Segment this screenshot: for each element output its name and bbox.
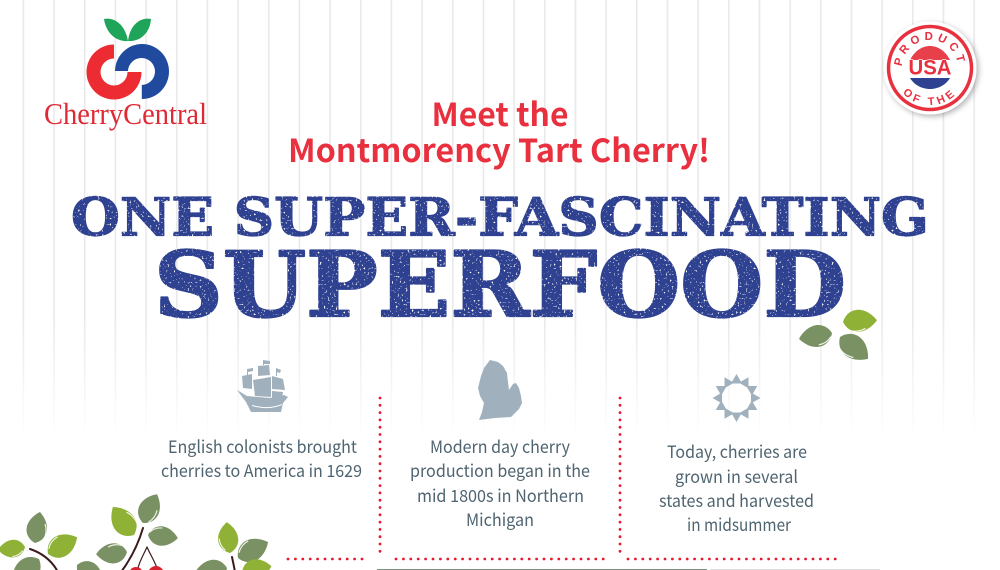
text: states and harvested bbox=[659, 487, 814, 512]
branches bbox=[30, 528, 235, 570]
text bbox=[659, 438, 814, 536]
next section image edge bbox=[377, 569, 880, 570]
title: SUPERFOOD bbox=[154, 232, 846, 338]
heading: Meet the bbox=[432, 90, 568, 136]
fact 1: colonists bbox=[161, 360, 362, 482]
badge arc text: OF THE bbox=[904, 89, 954, 105]
fact 2: Michigan bbox=[410, 360, 590, 531]
icon: sun bbox=[712, 374, 760, 422]
text: mid 1800s in Northern bbox=[417, 482, 584, 507]
title bbox=[71, 188, 929, 338]
text bbox=[161, 433, 362, 482]
badge: Product of the USA bbox=[882, 20, 982, 120]
badge USA: USA bbox=[908, 56, 952, 80]
text: in midsummer bbox=[687, 511, 791, 536]
logo red arc bbox=[86, 44, 142, 100]
text: grown in several bbox=[675, 463, 798, 488]
leaves bbox=[25, 510, 50, 545]
logo: Cherry Central bbox=[44, 19, 207, 131]
logo leaves bbox=[104, 19, 151, 41]
logo blue arc bbox=[115, 44, 169, 99]
heading bbox=[288, 90, 710, 172]
decorative leaves right of title bbox=[797, 309, 878, 368]
text: Today, cherries are bbox=[667, 438, 807, 463]
text: cherries to America in 1629 bbox=[161, 457, 362, 482]
text: production began in the bbox=[410, 457, 590, 482]
icon: ship bbox=[237, 360, 288, 412]
text: English colonists brought bbox=[168, 433, 358, 458]
badge arc text: PRODUCT bbox=[894, 32, 966, 66]
badge dome bbox=[910, 46, 950, 60]
logo wordmark: CherryCentral bbox=[44, 96, 207, 131]
icon: Michigan map bbox=[478, 360, 522, 420]
title: ONE SUPER-FASCINATING bbox=[71, 188, 929, 248]
badge arc text bbox=[894, 32, 966, 105]
badge blue band bbox=[910, 78, 950, 89]
text: Modern day cherry bbox=[430, 433, 570, 458]
heading: Montmorency Tart Cherry! bbox=[288, 126, 710, 172]
fact 3: harvest bbox=[659, 374, 814, 536]
cherries bbox=[129, 566, 164, 570]
text bbox=[410, 433, 590, 531]
cherry branch illustration bbox=[0, 489, 273, 570]
text: Michigan bbox=[466, 506, 534, 531]
